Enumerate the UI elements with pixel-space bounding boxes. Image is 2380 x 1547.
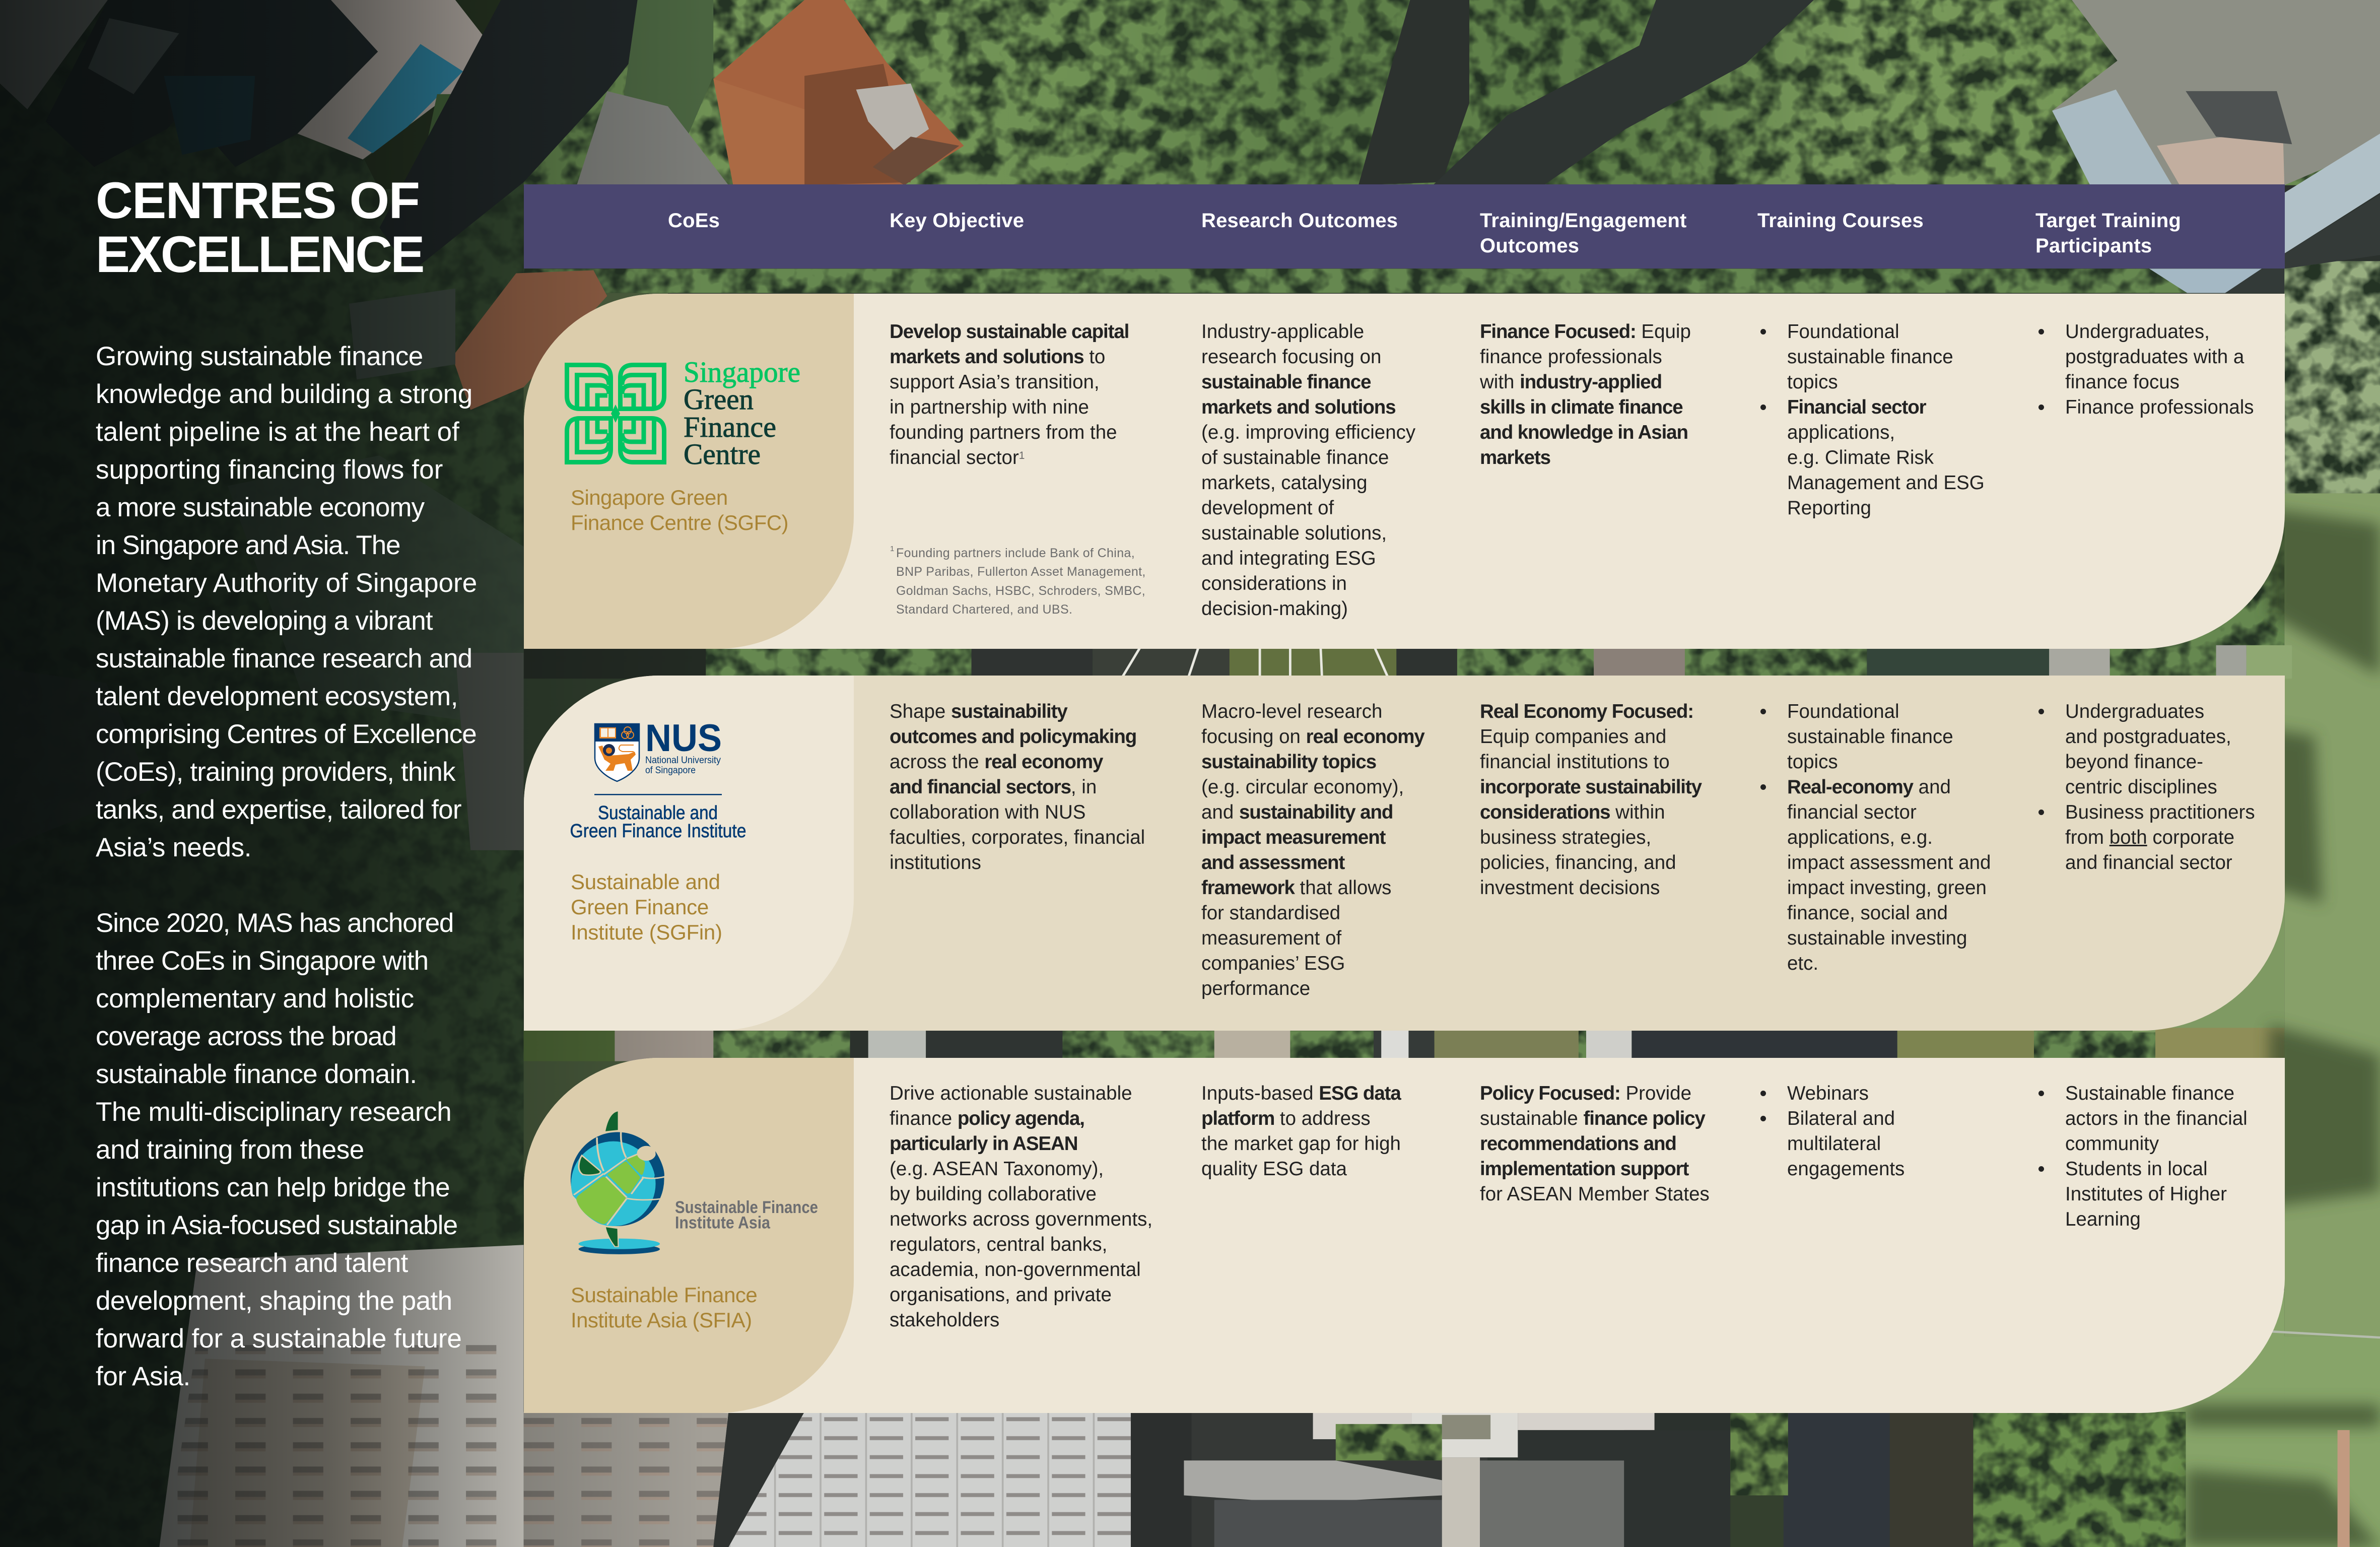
top-right building — [2052, 0, 2380, 185]
research outcomes: (e.g. improving efficiency — [1201, 422, 1415, 443]
key objective — [890, 321, 1129, 468]
research outcomes: sustainable finance — [1201, 371, 1371, 393]
key objective: particularly in ASEAN — [890, 1133, 1077, 1155]
logo: SGFC: Finance — [684, 411, 776, 443]
table header: Key Objective — [890, 210, 1024, 232]
panel: Singapore Green Finance Centre — [524, 294, 2285, 649]
table header: Target Training — [2035, 210, 2181, 232]
table header: CoEs — [668, 210, 720, 232]
table header — [524, 184, 2285, 268]
key objective: Drive actionable sustainable — [890, 1083, 1132, 1104]
name: SFIA — [571, 1283, 757, 1333]
intro text — [96, 342, 477, 1391]
title: CENTRES OF — [96, 172, 419, 229]
research outcomes: development of — [1201, 497, 1334, 519]
research outcomes: (e.g. circular economy), — [1201, 776, 1404, 798]
training courses: multilateral — [1787, 1133, 1881, 1155]
target participants: finance focus — [2065, 371, 2180, 393]
intro text: Monetary Authority of Singapore — [96, 568, 477, 598]
intro text: for Asia. — [96, 1362, 190, 1391]
logo: NUS SGFin: National University — [645, 755, 721, 766]
training courses: topics — [1787, 751, 1838, 773]
training courses: Foundational — [1787, 701, 1899, 722]
key objective: across the real economy — [890, 751, 1103, 773]
target participants: community — [2065, 1133, 2159, 1155]
training courses: sustainable investing — [1787, 927, 1967, 949]
panel: Singapore Green Finance Centre: 1 — [890, 545, 895, 553]
window rows — [728, 1412, 1131, 1547]
logo: SFIA globe: Sustainable Finance — [675, 1198, 818, 1217]
intro text: talent development ecosystem, — [96, 682, 458, 711]
table header: Training Courses — [1757, 210, 1924, 232]
research outcomes: focusing on real economy — [1201, 726, 1424, 748]
intro text: coverage across the broad — [96, 1022, 396, 1051]
intro text: The multi-disciplinary research — [96, 1097, 451, 1127]
target participants — [2035, 699, 2255, 876]
table header: Participants — [2035, 235, 2152, 257]
training courses: applications, — [1787, 422, 1895, 443]
name: SGFin — [571, 869, 722, 945]
research outcomes: sustainable solutions, — [1201, 522, 1387, 544]
target participants: Undergraduates — [2065, 701, 2204, 722]
intro text: in Singapore and Asia. The — [96, 530, 400, 560]
logo: NUS SGFin: NUS — [645, 717, 722, 760]
research outcomes: decision-making) — [1201, 598, 1348, 620]
training outcomes: business strategies, — [1480, 827, 1651, 848]
table header: Outcomes — [1480, 235, 1579, 257]
target participants: Sustainable finance — [2065, 1083, 2234, 1104]
key objective: founding partners from the — [890, 422, 1117, 443]
training courses: Financial sector — [1787, 396, 1926, 418]
name: SGFin: Sustainable and — [571, 870, 720, 894]
research outcomes — [1201, 1081, 1401, 1182]
intro text: and training from these — [96, 1135, 364, 1165]
training outcomes: policies, financing, and — [1480, 852, 1676, 873]
intro text: Asia’s needs. — [96, 833, 251, 862]
intro text: institutions can help bridge the — [96, 1173, 450, 1202]
title: EXCELLENCE — [96, 226, 423, 283]
logo: SFIA globe — [524, 1058, 876, 1413]
training courses: applications, e.g. — [1787, 827, 1933, 848]
training courses: sustainable finance — [1787, 346, 1953, 368]
training outcomes — [1480, 321, 1691, 468]
intro text: a more sustainable economy — [96, 493, 424, 522]
key objective: Shape sustainability — [890, 701, 1067, 722]
key objective: collaboration with NUS — [890, 801, 1085, 823]
intro text: tanks, and expertise, tailored for — [96, 795, 461, 825]
key objective: institutions — [890, 852, 981, 873]
key objective: organisations, and private — [890, 1284, 1112, 1306]
research outcomes — [1201, 699, 1424, 1001]
training outcomes: and knowledge in Asian — [1480, 422, 1688, 443]
research outcomes: markets and solutions — [1201, 396, 1396, 418]
key objective: financial sector1 — [890, 447, 1025, 468]
table header: Training/Engagement — [1480, 210, 1687, 232]
intro text: Since 2020, MAS has anchored — [96, 908, 453, 938]
training courses: e.g. Climate Risk — [1787, 447, 1934, 468]
target participants: from both corporate — [2065, 827, 2234, 848]
key objective: faculties, corporates, financial — [890, 827, 1145, 848]
target participants: centric disciplines — [2065, 776, 2217, 798]
research outcomes: markets, catalysing — [1201, 472, 1368, 494]
key objective: and financial sectors, in — [890, 776, 1097, 798]
training outcomes: sustainable finance policy — [1480, 1108, 1705, 1129]
training courses: impact investing, green — [1787, 877, 1987, 899]
intro text: comprising Centres of Excellence — [96, 719, 477, 749]
logo: SGFC: Green — [684, 383, 754, 416]
key objective: regulators, central banks, — [890, 1234, 1107, 1255]
intro text: complementary and holistic — [96, 984, 414, 1014]
key objective — [890, 699, 1145, 876]
training courses: topics — [1787, 371, 1838, 393]
key objective: outcomes and policymaking — [890, 726, 1136, 748]
research outcomes — [1201, 321, 1415, 620]
logo: NUS SGFin: Sustainable and — [598, 802, 718, 824]
training outcomes: Policy Focused: Provide — [1480, 1083, 1691, 1104]
training courses: finance, social and — [1787, 902, 1948, 924]
research outcomes: Macro-level research — [1201, 701, 1382, 722]
training courses: Management and ESG — [1787, 472, 1985, 494]
logo: NUS SGFin: Green Finance Institute — [570, 821, 746, 842]
research outcomes: performance — [1201, 978, 1310, 999]
training outcomes: with industry-applied — [1480, 371, 1662, 393]
left column tones — [159, 1245, 524, 1547]
intro text: forward for a sustainable future — [96, 1324, 462, 1354]
training courses: sustainable finance — [1787, 726, 1953, 748]
training outcomes: Finance Focused: Equip — [1480, 321, 1691, 343]
intro text: three CoEs in Singapore with — [96, 946, 428, 976]
training courses — [1757, 699, 1991, 976]
target participants: Institutes of Higher — [2065, 1183, 2227, 1205]
key objective: markets and solutions to — [890, 346, 1105, 368]
training courses: Foundational — [1787, 321, 1899, 343]
target participants: Undergraduates, — [2065, 321, 2210, 343]
training outcomes: finance professionals — [1480, 346, 1662, 368]
intro text: Growing sustainable finance — [96, 342, 423, 371]
name: SFIA: Sustainable Finance — [571, 1283, 757, 1307]
bottom band — [524, 1412, 728, 1547]
logo: SGFC: Singapore — [684, 356, 800, 388]
target participants: postgraduates with a — [2065, 346, 2244, 368]
training outcomes: implementation support — [1480, 1158, 1688, 1180]
training courses: Real-economy and — [1787, 776, 1951, 798]
intro text: development, shaping the path — [96, 1286, 452, 1316]
training outcomes — [1480, 699, 1702, 901]
strip y679-697 — [524, 1028, 615, 1061]
training outcomes: Real Economy Focused: — [1480, 701, 1693, 722]
training outcomes: Equip companies and — [1480, 726, 1666, 748]
key objective: stakeholders — [890, 1309, 999, 1331]
orange roof — [713, 0, 964, 185]
footnote: Goldman Sachs, HSBC, Schroders, SMBC, — [896, 584, 1145, 598]
name: SFIA: Institute Asia (SFIA) — [571, 1308, 752, 1332]
target participants: Business practitioners — [2065, 801, 2255, 823]
dark gaps between trees — [1358, 0, 1469, 185]
logo: NUS SGFin — [570, 717, 746, 842]
research outcomes: sustainability topics — [1201, 751, 1376, 773]
key objective: finance policy agenda, — [890, 1108, 1084, 1129]
research outcomes: companies’ ESG — [1201, 953, 1345, 974]
intro text: supporting financing flows for — [96, 455, 443, 485]
target participants: beyond finance- — [2065, 751, 2203, 773]
footnote: Standard Chartered, and UBS. — [896, 602, 1072, 617]
name: SGFin: Green Finance — [571, 895, 709, 919]
training courses: etc. — [1787, 953, 1818, 974]
intro text: sustainable finance research and — [96, 644, 472, 674]
research outcomes: and assessment — [1201, 852, 1344, 873]
key objective: Develop sustainable capital — [890, 321, 1129, 343]
name: SGFC: Finance Centre (SGFC) — [571, 511, 788, 534]
table header: Research Outcomes — [1201, 210, 1398, 232]
footnote: Founding partners include Bank of China, — [896, 546, 1135, 560]
intro text: knowledge and building a strong — [96, 379, 472, 409]
training courses: Webinars — [1787, 1083, 1869, 1104]
training outcomes: skills in climate finance — [1480, 396, 1683, 418]
footnote: BNP Paribas, Fullerton Asset Management, — [896, 565, 1146, 579]
research outcomes: research focusing on — [1201, 346, 1381, 368]
research outcomes: framework that allows — [1201, 877, 1391, 899]
logo: SFIA globe: Institute Asia — [675, 1213, 771, 1232]
training courses — [1760, 321, 1985, 519]
research outcomes: Inputs-based ESG data — [1201, 1083, 1401, 1104]
research outcomes: for standardised — [1201, 902, 1340, 924]
strip y427-445 — [524, 645, 706, 679]
top-left building — [0, 0, 108, 109]
name: SGFC: Singapore Green — [571, 486, 728, 509]
training outcomes: considerations within — [1480, 801, 1665, 823]
target participants — [2035, 1081, 2248, 1232]
name: SGFC — [571, 486, 788, 534]
logo: SGFC: Centre — [684, 438, 761, 470]
training courses: financial sector — [1787, 801, 1917, 823]
title — [96, 172, 423, 283]
research outcomes: measurement of — [1201, 927, 1341, 949]
key objective: academia, non-governmental — [890, 1259, 1141, 1281]
intro text: talent pipeline is at the heart of — [96, 417, 459, 447]
training outcomes: investment decisions — [1480, 877, 1660, 899]
name: SGFin: Institute (SGFin) — [571, 920, 722, 944]
research outcomes: the market gap for high — [1201, 1133, 1401, 1155]
research outcomes: and sustainability and — [1201, 801, 1393, 823]
intro text: (CoEs), training providers, think — [96, 757, 455, 787]
logo: NUS SGFin: of Singapore — [645, 765, 696, 776]
key objective: support Asia’s transition, — [890, 371, 1100, 393]
training outcomes: incorporate sustainability — [1480, 776, 1702, 798]
training outcomes: for ASEAN Member States — [1480, 1183, 1710, 1205]
key objective: by building collaborative — [890, 1183, 1097, 1205]
research outcomes: platform to address — [1201, 1108, 1371, 1129]
target participants: and postgraduates, — [2065, 726, 2231, 748]
intro text: (MAS) is developing a vibrant — [96, 606, 433, 636]
training outcomes: markets — [1480, 447, 1550, 468]
research outcomes: quality ESG data — [1201, 1158, 1347, 1180]
training courses: Bilateral and — [1787, 1108, 1895, 1129]
intro text: gap in Asia-focused sustainable — [96, 1210, 457, 1240]
training courses: Reporting — [1787, 497, 1871, 519]
strip under header — [452, 270, 607, 410]
target participants: actors in the financial — [2065, 1108, 2248, 1129]
research outcomes: considerations in — [1201, 573, 1347, 594]
research outcomes: and integrating ESG — [1201, 548, 1376, 569]
training outcomes: financial institutions to — [1480, 751, 1670, 773]
training courses — [1757, 1081, 1905, 1182]
intro text: finance research and talent — [96, 1248, 408, 1278]
target participants: Learning — [2065, 1208, 2141, 1230]
key objective: in partnership with nine — [890, 396, 1089, 418]
research outcomes: impact measurement — [1201, 827, 1385, 848]
key objective: (e.g. ASEAN Taxonomy), — [890, 1158, 1104, 1180]
research outcomes: Industry-applicable — [1201, 321, 1364, 343]
target participants: Finance professionals — [2065, 396, 2254, 418]
rounded card corners reveal — [2133, 516, 2284, 650]
logo: SGFC — [565, 356, 800, 470]
panel: Sustainable Finance Institute Asia — [524, 1058, 2285, 1413]
training courses: impact assessment and — [1787, 852, 1991, 873]
research outcomes: of sustainable finance — [1201, 447, 1389, 468]
footnote — [890, 545, 1146, 617]
intro text: sustainable finance domain. — [96, 1059, 417, 1089]
target participants: and financial sector — [2065, 852, 2232, 873]
training outcomes — [1480, 1081, 1710, 1207]
key objective: networks across governments, — [890, 1208, 1152, 1230]
panel: Sustainable and Green Finance Institute — [524, 676, 2285, 1031]
target participants: Students in local — [2065, 1158, 2208, 1180]
training outcomes: recommendations and — [1480, 1133, 1676, 1155]
target participants — [2038, 321, 2254, 418]
key objective — [890, 1081, 1152, 1333]
training courses: engagements — [1787, 1158, 1905, 1180]
